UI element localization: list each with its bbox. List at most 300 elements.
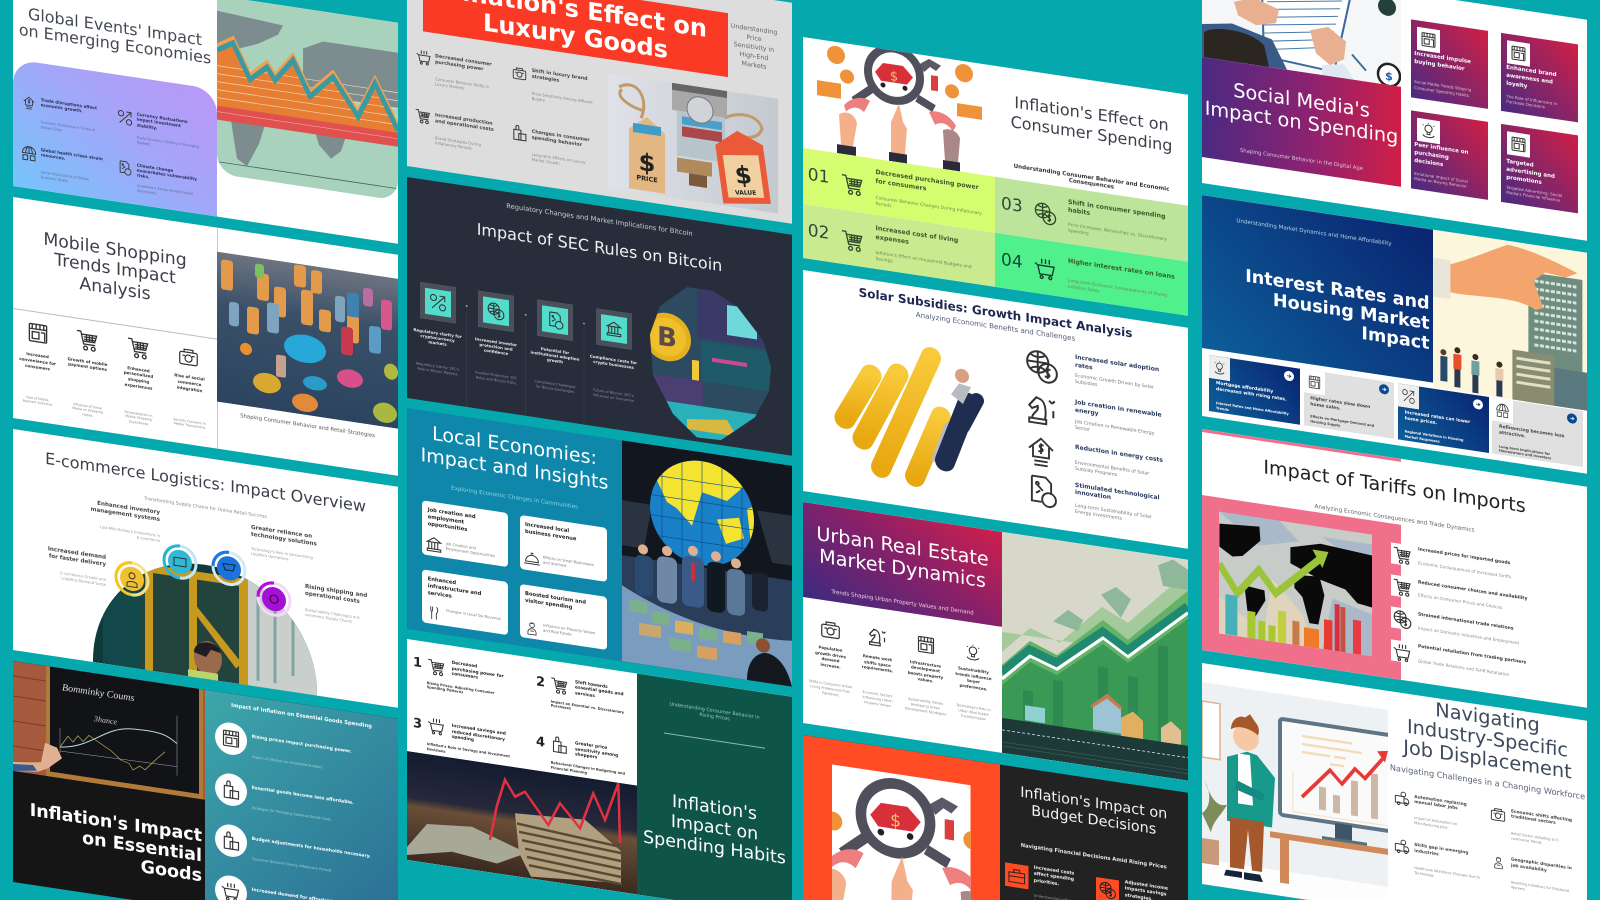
- item heading: Targeted: [1506, 158, 1533, 168]
- icon: globe: [1393, 609, 1412, 630]
- card text: Employment Opportunities: [446, 547, 495, 558]
- item subtext: Sustainability Trends: [907, 697, 943, 706]
- title: Local Economies:: [432, 423, 597, 469]
- item heading: [1414, 141, 1468, 173]
- item subtext: Consumer Behavior During Inflationary Periods: [252, 856, 331, 872]
- item subtext: Global Trade Relations and Tariff Retaliation: [1418, 658, 1509, 677]
- item subtext: Property Values: [864, 700, 890, 708]
- title: Impact of SEC Rules on Bitcoin: [477, 219, 722, 275]
- title: E-commerce Logistics: Impact Overview: [45, 448, 366, 515]
- item subtext: [528, 378, 582, 396]
- item heading: [124, 365, 153, 391]
- item heading: increase.: [820, 661, 840, 669]
- subtitle: Transforming Supply Chains for Online Retail Success: [144, 496, 267, 520]
- image: price and value tags with camera: PRICE: [636, 173, 658, 185]
- icon tile: briefcase: [1004, 862, 1028, 889]
- card 1: [1209, 355, 1300, 424]
- item subtext: [1404, 429, 1463, 448]
- item subtext: Long-term Economic Consequences of Rising: [1068, 279, 1167, 299]
- item heading: markets: [428, 339, 447, 347]
- image: hands marking a document: [1202, 0, 1401, 87]
- item heading: trends influence: [955, 670, 991, 681]
- item heading: Stimulated technological: [1074, 481, 1159, 501]
- column separator: [216, 228, 219, 449]
- image: green rising housing chart: [1002, 532, 1188, 781]
- item heading: services: [575, 691, 595, 699]
- image: colourful pie and pillars on a data board: [217, 252, 398, 429]
- item subtext: Technology's Role in: [956, 703, 990, 712]
- item heading: Mortgage affordability: [1216, 381, 1273, 394]
- item subtext: [1074, 420, 1154, 445]
- item heading: [1404, 410, 1470, 433]
- item heading: affect spending: [1033, 872, 1074, 883]
- title: [802, 521, 1002, 594]
- item heading: decisions: [1414, 158, 1443, 168]
- item heading: confidence: [484, 348, 508, 356]
- item heading: payment options: [68, 362, 107, 372]
- item heading: consumers: [452, 672, 478, 681]
- item heading: shoppers: [575, 753, 597, 761]
- title: Global Events' Impact: [28, 4, 202, 49]
- item heading: home sales.: [1310, 402, 1340, 412]
- title: Inflation's: [672, 791, 757, 824]
- item subtext: Security Concerns in: [173, 417, 206, 425]
- item subtext: Purchases: [551, 704, 571, 711]
- card heading: [428, 576, 481, 605]
- side note: [729, 21, 779, 73]
- item heading: [852, 652, 902, 676]
- card text: Job Creation and: [446, 542, 476, 550]
- image: price and value tags with camera: $: [639, 148, 655, 178]
- title: [407, 419, 622, 497]
- card text: Effects on Small Businesses: [543, 555, 594, 567]
- item subtext: Investor Protection: SEC: [475, 370, 517, 380]
- slide: Inflation's Impact on Essential Goods: [13, 661, 398, 900]
- item heading: impacts savings: [1124, 887, 1166, 898]
- item subtext: [72, 401, 103, 418]
- title: [43, 229, 187, 305]
- icon: basket: [416, 48, 432, 67]
- item subtext: Effects on Consumer Prices and Choices: [1418, 592, 1502, 610]
- item heading: Greater reliance on: [251, 524, 312, 539]
- title: Goods: [141, 857, 202, 886]
- item heading: operational costs: [305, 591, 360, 605]
- item heading: Increased investor: [475, 335, 517, 347]
- item heading: management systems: [91, 506, 160, 523]
- icon: camera: [820, 618, 840, 642]
- item heading: Population: [818, 644, 842, 653]
- number 03: 03: [1000, 194, 1022, 217]
- item subtext: Future of Bitcoin: SEC's: [593, 388, 634, 398]
- item subtext: [435, 135, 481, 152]
- image: chalkboard graph: Bomminky Coums: [62, 682, 135, 704]
- item heading: awareness and: [1506, 73, 1553, 86]
- item heading: resources.: [41, 153, 65, 161]
- item heading: job availability: [1511, 863, 1546, 873]
- item heading: [1414, 843, 1468, 862]
- item heading: industries: [1414, 848, 1438, 857]
- item heading: manual labor jobs: [1414, 800, 1457, 811]
- icon: camera: [511, 65, 528, 82]
- item subtext: Inflation Rates: [1068, 285, 1099, 295]
- item heading: [875, 169, 978, 202]
- slide: E-commerce Logistics: [13, 428, 398, 707]
- card 3: [1397, 383, 1488, 452]
- item subtext: Healthcare Workforce Changes Due to: [1414, 865, 1480, 879]
- item subtext: Targeted Advertising: Social: [1506, 184, 1562, 198]
- item heading: priorities.: [1033, 878, 1059, 887]
- item heading: demand: [821, 656, 839, 664]
- item subtext: Financial Planning: [551, 765, 587, 775]
- item heading: Regulatory clarity for: [413, 326, 462, 338]
- item heading: Changes in consumer: [532, 130, 590, 143]
- icon circle: basket: [215, 873, 247, 900]
- item subtext: Sector: [1074, 426, 1090, 433]
- item subtext: Manufacturing Jobs: [1414, 821, 1447, 829]
- title: Luxury Goods: [483, 8, 668, 64]
- item heading: [900, 657, 950, 687]
- item subtext: [900, 696, 950, 718]
- item subtext: Environmental Benefits of Solar: [1074, 460, 1149, 476]
- card 3: [1411, 110, 1487, 199]
- item heading: decreases with rising rates.: [1216, 387, 1286, 403]
- illustration: piggy bank under magnifier with hands: [802, 37, 994, 177]
- item heading: [1124, 880, 1168, 900]
- image: money stack with red chart line: [407, 751, 637, 894]
- item subtext: Role in Bitcoin Markets: [418, 366, 457, 376]
- card heading: opportunities: [428, 521, 467, 533]
- title: on Essential: [82, 828, 202, 866]
- slide: Impact of Tariffs on Imports: [1202, 429, 1587, 708]
- item subtext: Media on Buying Behavior: [1414, 176, 1466, 189]
- item heading: economic growth.: [41, 103, 83, 114]
- item heading: institutional adoption: [530, 349, 580, 361]
- item subtext: Experiences: [129, 420, 148, 427]
- card heading: [525, 522, 576, 543]
- title: Job Displacement: [1403, 735, 1571, 783]
- subtitle: [637, 698, 792, 733]
- item heading: Automation replacing: [1414, 794, 1466, 807]
- item heading: [1414, 50, 1471, 74]
- item heading: Enhanced inventory: [97, 500, 160, 515]
- item subtext: E-commerce Growth and: [60, 570, 106, 581]
- icon: percent: [118, 110, 132, 126]
- item subtext: Emotional Impact of Social: [1414, 170, 1467, 183]
- item subtext: Consumer Behavior Shifts in: [435, 76, 489, 89]
- item heading: attractive.: [1499, 430, 1525, 439]
- item subtext: Inflation's Effect on Household Budgets and: [875, 250, 971, 270]
- image: yellow solar stripes with man: [822, 318, 992, 508]
- subtitle: Analyzing Economic Benefits and Challenges: [915, 310, 1075, 343]
- icon: doc: [120, 160, 132, 176]
- item heading: [1216, 381, 1286, 404]
- icon: cart: [1393, 544, 1412, 566]
- item heading: Global health crises strain: [41, 147, 103, 161]
- item subtext: Economic Shifts: [41, 175, 68, 183]
- title: Inflation's Impact: [30, 800, 202, 846]
- subtitle: Shaping Consumer Behavior in the Digital Age: [1240, 148, 1363, 172]
- subtitle: [994, 161, 1188, 203]
- title: Impact: [1361, 324, 1429, 355]
- item heading: Increased production: [435, 113, 493, 127]
- item heading: Skills gap in emerging: [1414, 843, 1468, 856]
- item subtext: Personalization in: [124, 409, 153, 417]
- item subtext: Living Preferences Post-: [810, 684, 850, 694]
- number 01: 01: [807, 165, 829, 188]
- icon circle: bag: [215, 822, 247, 859]
- item subtext: [948, 702, 998, 724]
- item heading: Higher interest rates on loans: [1068, 258, 1174, 281]
- icon circle: store: [215, 720, 247, 757]
- number 3: 3: [413, 715, 422, 732]
- item subtext: Consumer Behavior Changes During Inflationary: [875, 195, 981, 216]
- item subtext: Impact on Essential vs. Discretionary: [551, 699, 624, 714]
- item heading: [174, 372, 205, 393]
- item subtext: Price Increases: Necessities vs. Discretionary: [1068, 223, 1166, 243]
- item subtext: [1074, 374, 1153, 398]
- image: globe in a control room: [622, 440, 792, 687]
- card: [422, 500, 508, 567]
- item heading: [137, 112, 188, 130]
- card: [422, 569, 508, 635]
- item heading: Refinancing becomes less: [1499, 424, 1564, 439]
- icon: doc: [1024, 470, 1058, 511]
- item subtext: Housing Supply: [1310, 419, 1340, 428]
- title: [1202, 75, 1401, 150]
- title: [994, 90, 1188, 158]
- item subtext: Rise of Mobile: [26, 395, 49, 402]
- side note: Understanding: [731, 22, 777, 36]
- item heading: Essential goods become less affordable.: [252, 785, 354, 805]
- slide: Global Events' Impact on Emerging Economies: [13, 0, 398, 244]
- item subtext: Spending Patterns: [427, 685, 463, 695]
- image: chalkboard graph: [13, 661, 205, 799]
- item heading: Growth of mobile: [68, 356, 107, 367]
- icon: cart: [128, 338, 148, 360]
- item heading: growth drives: [815, 649, 845, 659]
- title: Impact and Insights: [421, 444, 608, 494]
- panel: block 01: [802, 148, 994, 233]
- item subtext: Homeowners and Investors: [1499, 449, 1551, 461]
- card 1: [1411, 19, 1487, 108]
- white tab: [1391, 542, 1401, 565]
- item heading: Greater price: [575, 741, 607, 751]
- item subtext: Influence of Social: [73, 401, 102, 410]
- item subtext: Last-Mile Delivery Innovations in: [100, 525, 160, 538]
- item heading: Infrastructure: [909, 659, 941, 668]
- item subtext: [587, 387, 640, 405]
- slide: Local Economies: [407, 408, 792, 687]
- item heading: Rising prices impact purchasing power.: [252, 734, 351, 754]
- number 02: 02: [807, 220, 829, 243]
- card heading: Increased local: [525, 522, 569, 534]
- chart image: world map with falling line: [217, 0, 398, 198]
- item subtext: Brand Strategies During: [435, 135, 481, 147]
- item heading: Economic shifts affecting: [1511, 809, 1572, 823]
- card heading: infrastructure and: [428, 583, 481, 597]
- icon: globe: [1024, 347, 1058, 386]
- image: hand placing a building: [1432, 230, 1587, 411]
- item heading: [452, 661, 504, 686]
- white tab: [1391, 606, 1401, 629]
- icon: knight: [866, 626, 888, 650]
- card text: [446, 542, 495, 560]
- card 4: [1492, 398, 1583, 467]
- item subtext: Logistics Operations: [251, 552, 288, 561]
- item heading: rates: [1074, 361, 1092, 371]
- item subtext: Subsidies: [1074, 380, 1097, 389]
- icon: umbrella: [22, 146, 36, 162]
- card 2: [1501, 32, 1577, 122]
- item heading: Shift towards: [575, 680, 608, 690]
- item subtext: Uncertainty: [137, 188, 156, 195]
- item subtext: [806, 678, 854, 701]
- item subtext: Trade Dynamics Shifting in Emerging: [137, 135, 199, 148]
- item subtext: Economic Growth Driven by Solar: [1074, 374, 1153, 391]
- slide: Impact of SEC Rules on Bitcoin: [407, 177, 792, 455]
- item subtext: Strategies for Managing Essential Goods Costs: [252, 805, 331, 821]
- item heading: growth: [547, 357, 563, 364]
- item heading: Increased solar adoption: [1074, 354, 1159, 373]
- item heading: Decreased: [452, 661, 477, 670]
- item subtext: Economic Resilience in Times of: [41, 120, 95, 132]
- arrow button: [1378, 383, 1388, 395]
- item subtext: for Bitcoin Exchanges: [536, 384, 574, 394]
- item heading: for faster delivery: [49, 553, 106, 568]
- item heading: [452, 724, 506, 749]
- icon: truck: [1394, 789, 1410, 808]
- item heading: boosts property: [907, 669, 943, 680]
- item subtext: Social Implications of Global: [41, 170, 89, 181]
- item heading: Increased impulse: [1414, 51, 1471, 65]
- item heading: [411, 326, 464, 350]
- title: [637, 786, 792, 869]
- item heading: Enhanced: [127, 365, 150, 373]
- item heading: requirements.: [861, 664, 893, 674]
- red title banner: [423, 0, 728, 77]
- title: Consumer Spending: [1010, 112, 1172, 155]
- item heading: for consumers: [875, 178, 926, 192]
- item heading: Adjusted income: [1124, 880, 1168, 892]
- item heading: stability.: [137, 122, 157, 130]
- title: [1202, 260, 1429, 355]
- card: [520, 515, 607, 582]
- subtitle: Analyzing Economic Consequences and Trade Dynamics: [1314, 503, 1474, 533]
- item subtext: Long-term Sustainability of Solar: [1074, 504, 1151, 520]
- title: Inflation's Impact on: [1020, 785, 1167, 823]
- card heading: visitor spending: [525, 597, 572, 610]
- title: Industry-Specific: [1407, 715, 1568, 762]
- item subtext: Regional Variations in Housing: [1404, 429, 1463, 442]
- panel: teal list: [205, 689, 398, 900]
- icon tile: [1417, 117, 1440, 145]
- item heading: [875, 225, 958, 255]
- item subtext: Logistics Demand Surge: [61, 576, 106, 586]
- item subtext: Technology: [1414, 870, 1433, 877]
- item heading: [948, 664, 998, 694]
- icon: basket: [426, 716, 446, 737]
- item subtext: Investment Trends Amidst Global: [137, 183, 193, 195]
- title: Spending Habits: [643, 827, 786, 869]
- subtitle: Understanding Market Dynamics and Home Affordability: [1236, 218, 1391, 247]
- item heading: experiences: [125, 382, 152, 391]
- item subtext: Pandemic: [822, 691, 838, 697]
- subtitle: Trends Shaping Urban Property Values and Demand: [831, 589, 973, 617]
- subtitle: Understanding Consumer Behavior and Economic: [1013, 164, 1169, 193]
- icon: bag: [550, 734, 569, 755]
- slide: Navigating Industry-Specific Job Displacement: [1202, 663, 1587, 900]
- item heading: Increased prices for imported goods: [1418, 547, 1510, 566]
- item heading: Enhanced brand: [1506, 65, 1556, 78]
- item subtext: Interest Rates and Home Affordability: [1216, 401, 1288, 416]
- item heading: [587, 352, 640, 371]
- icon: cart: [840, 227, 864, 254]
- image: price and value tags with camera: [608, 73, 778, 214]
- illustration: piggy bank under magnifier with hands: $: [889, 69, 898, 85]
- item heading: [528, 343, 582, 368]
- item subtext: [1499, 444, 1551, 461]
- item subtext: Effects on Mortgage Demand and: [1310, 414, 1374, 428]
- item heading: consumers: [25, 362, 50, 371]
- subtitle: Regulatory Changes and Market Implications for Bitcoin: [506, 201, 693, 237]
- item heading: [575, 741, 618, 765]
- item subtext: [1074, 504, 1151, 528]
- icon: camera: [179, 348, 198, 366]
- item heading: [1310, 396, 1370, 418]
- icon: cart: [426, 656, 446, 677]
- item heading: Increased: [26, 351, 49, 359]
- title: [423, 0, 728, 73]
- icon: knight: [1024, 391, 1058, 430]
- subtitle: Consequences: [1068, 178, 1114, 191]
- item heading: Sustainability: [958, 665, 988, 675]
- item subtext: Reskilling Initiatives for Displaced: [1511, 880, 1569, 892]
- illustration: presenter with rising chart: [1202, 682, 1388, 900]
- item heading: Strained international trade relations: [1418, 612, 1513, 632]
- icon: bank: [425, 534, 443, 555]
- item subtext: [470, 369, 522, 387]
- icon: house: [24, 96, 34, 110]
- slide: Social Media's Impact on Spending: [1202, 0, 1587, 241]
- item heading: Decreased purchasing power: [875, 169, 978, 191]
- icon: cart: [415, 107, 431, 126]
- item subtext: Buyers: [532, 95, 545, 102]
- item heading: Budget adjustments for households necessary.: [252, 836, 371, 859]
- icon: basket: [1034, 256, 1056, 282]
- item heading: personalized: [124, 370, 153, 379]
- icon: cart: [1393, 577, 1412, 598]
- panel heading: Impact of Inflation on Essential Goods Spending: [231, 702, 372, 729]
- side note: Price: [746, 33, 762, 43]
- icon: person: [525, 620, 539, 638]
- item subtext: [411, 360, 464, 379]
- item heading: Rising shipping and: [305, 583, 367, 598]
- item subtext: Mobile Transactions: [174, 422, 205, 430]
- item heading: innovation: [1074, 489, 1110, 501]
- arrow button: [1283, 370, 1293, 381]
- item subtext: Mobile Shopping: [125, 414, 152, 422]
- icon: bell: [523, 548, 541, 568]
- image: warehouse circle: [93, 564, 317, 696]
- icon ring: blue: [212, 550, 246, 586]
- item subtext: commerce Supply Chains: [305, 613, 352, 624]
- item subtext: Long-term Implications for: [1499, 444, 1550, 456]
- white tab: [1391, 639, 1401, 662]
- item subtext: Subsidy Programs: [1074, 467, 1117, 478]
- icon: person: [1492, 853, 1505, 872]
- item heading: Rise of social: [174, 372, 205, 382]
- icon: cart: [840, 172, 864, 198]
